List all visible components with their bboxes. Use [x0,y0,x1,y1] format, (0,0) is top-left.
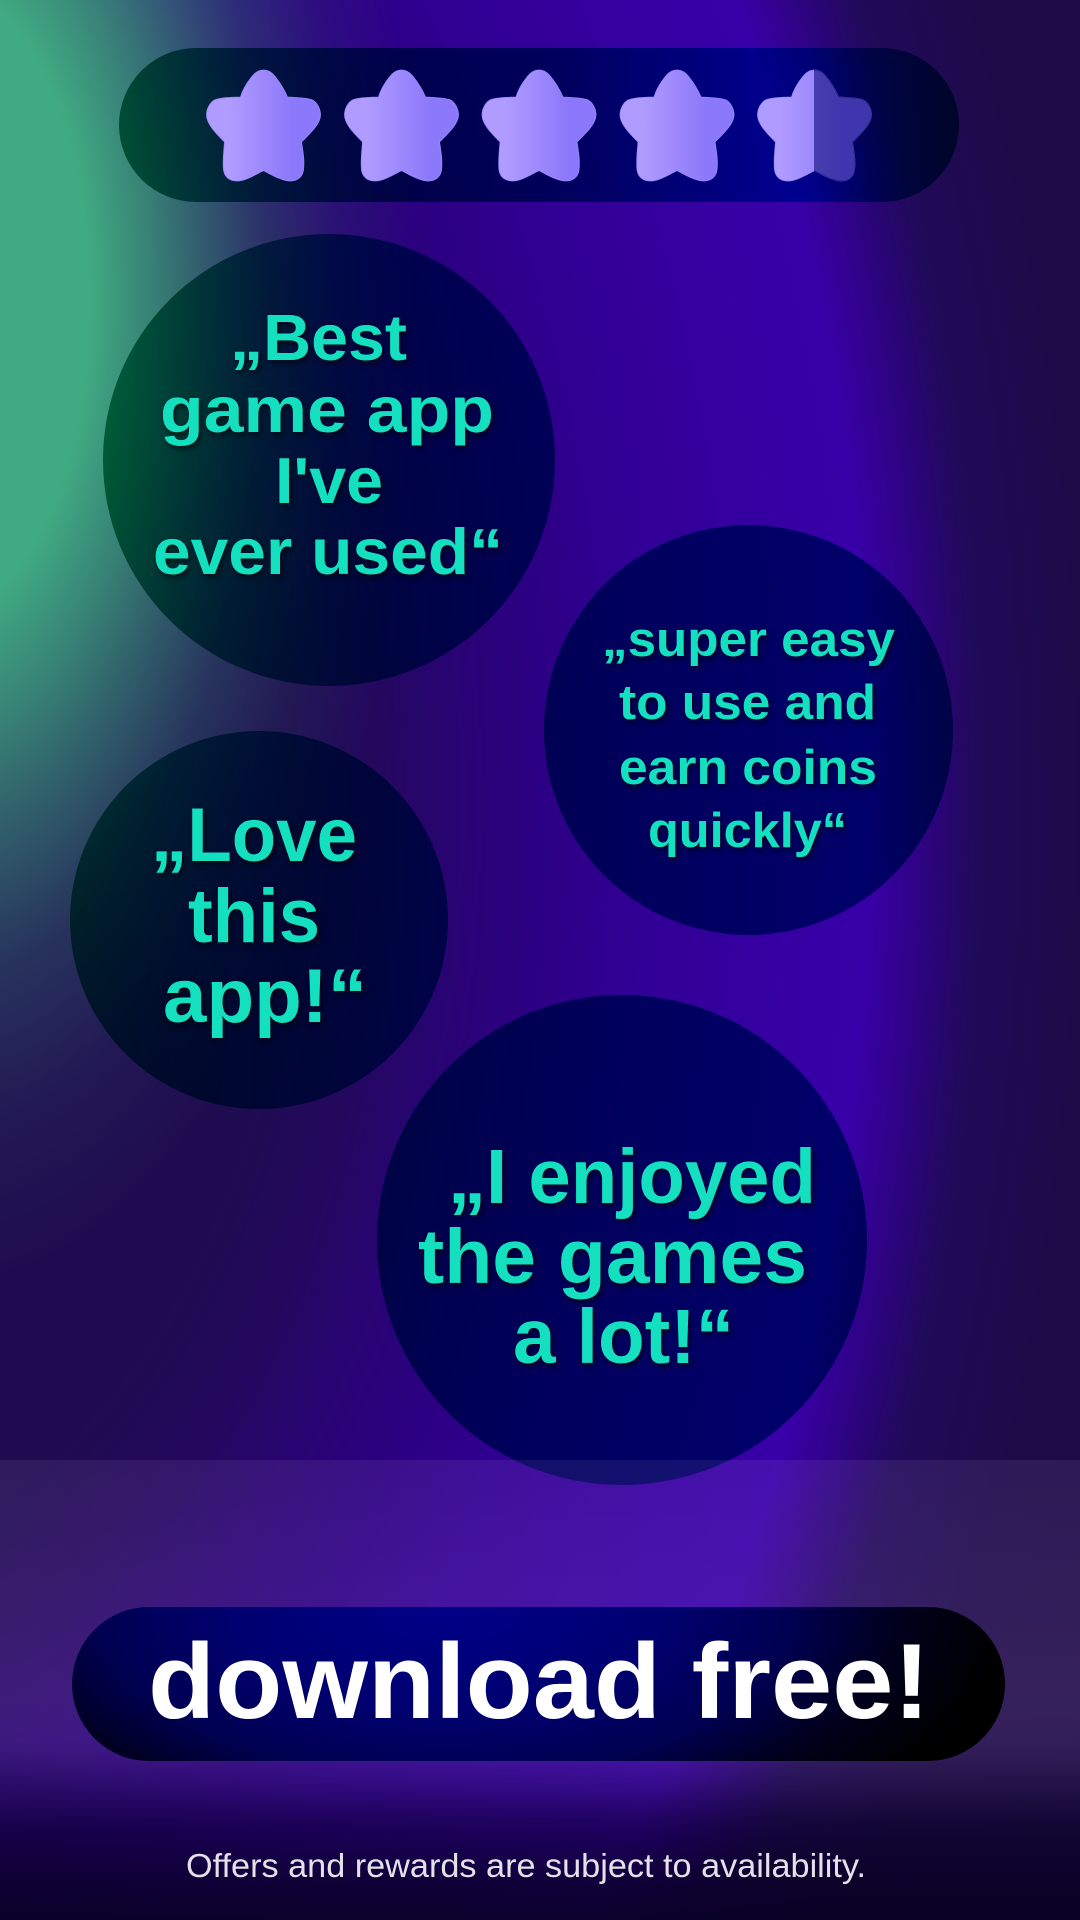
star icons [206,70,872,182]
quote text: the games [418,1214,807,1300]
quote text [418,1134,816,1380]
disclaimer: Offers and rewards are subject to availability. [186,1847,866,1884]
speech bubble: enjoyed the games [377,995,867,1485]
button label: download free! [148,1621,930,1741]
speech bubble: best game app [103,234,555,686]
quote text: earn coins [619,741,877,795]
speech bubble: super easy [544,525,953,935]
download button [72,1607,1005,1761]
quote text: ever used“ [153,515,503,588]
quote text: to use and [619,676,876,730]
quote text [153,301,503,588]
quote text: game app [160,373,494,446]
quote text: quickly“ [648,804,847,858]
quote text: „super easy [602,613,895,667]
quote text [151,793,367,1042]
quote text [602,613,898,863]
speech bubble: love this app [70,731,448,1109]
bottom overlay panel [0,1460,1080,1920]
rating pill with stars [119,48,959,202]
quote text: I've [275,444,383,517]
quote text: „Best [230,301,407,374]
quote text: this [188,874,320,959]
quote text: „I enjoyed [448,1134,816,1220]
quote text: app!“ [163,954,367,1039]
quote text: a lot!“ [513,1294,734,1380]
quote text: „Love [151,793,357,878]
